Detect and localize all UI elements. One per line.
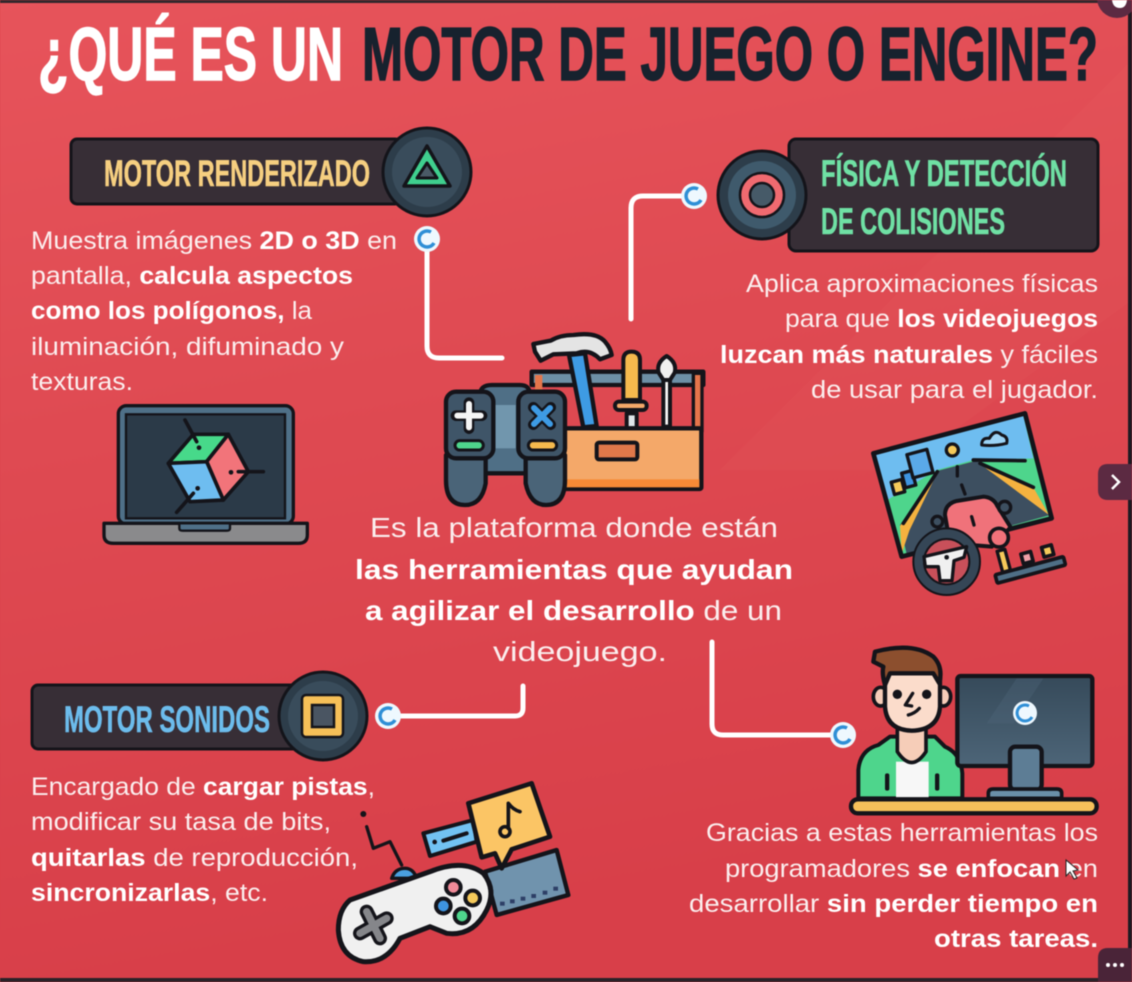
badge: motor renderizado: MOTOR RENDERIZADO [104, 153, 370, 194]
badge: física y detección [718, 139, 1098, 251]
text: motor renderizado: texturas. [31, 368, 133, 396]
text: motor renderizado [31, 227, 397, 396]
icon: controller with music [338, 783, 568, 962]
title [38, 12, 1098, 96]
icon: toolbox with gamepad [446, 334, 703, 505]
text: motor renderizado: como los polígonos, la [31, 297, 312, 325]
badge: motor renderizado [71, 128, 471, 216]
hammer [533, 334, 612, 427]
panel: motor sonidos [31, 672, 568, 962]
text: motor renderizado: iluminación, difuminado y [31, 333, 345, 361]
panel: motor renderizado [31, 128, 471, 543]
text: programmers: programadores se enfocan en [725, 855, 1098, 883]
text: central description: videojuego. [493, 636, 667, 667]
text: programmers: otras tareas. [934, 925, 1098, 953]
icon: driving simulator [873, 413, 1066, 590]
badge: física y detección: DE COLISIONES [821, 201, 1005, 242]
badge: motor sonidos [32, 672, 367, 760]
badge: motor sonidos: MOTOR SONIDOS [64, 699, 270, 740]
icon: laptop with cube [104, 406, 307, 543]
text: motor renderizado: pantalla, calcula aspectos [31, 262, 353, 290]
panel: programmers [689, 648, 1098, 953]
text: física: para que los videojuegos [785, 305, 1098, 333]
text: física [720, 270, 1098, 404]
text: física: luzcan más naturales y fáciles [720, 341, 1098, 369]
text: física: Aplica aproximaciones físicas [746, 270, 1098, 298]
text: motor sonidos: quitarlas de reproducción, [31, 844, 358, 872]
connector lines [388, 196, 843, 735]
text: motor renderizado: Muestra imágenes 2D o 3D en [31, 227, 397, 255]
screwdrivers [615, 352, 675, 428]
text: central description: Es la plataforma donde están [370, 512, 778, 543]
text: motor sonidos: Encargado de cargar pistas , [31, 773, 375, 801]
text: física: de usar para el jugador. [811, 376, 1098, 404]
text: motor sonidos [31, 773, 375, 907]
text: central description [355, 512, 793, 667]
panel: física y detección de colisiones [718, 139, 1098, 590]
viewer controls [1097, 0, 1132, 982]
connector nodes [375, 183, 1037, 748]
text: motor sonidos: sincronizarlas , etc. [31, 879, 268, 907]
text: programmers: desarrollar sin perder tiempo en [689, 890, 1098, 918]
title: ¿QUÉ ES UN [38, 12, 343, 96]
text: motor sonidos: modificar su tasa de bits, [31, 808, 331, 836]
icon: programmer at monitor [851, 648, 1097, 813]
text: programmers [689, 819, 1098, 953]
text: programmers: Gracias a estas herramientas los [706, 819, 1098, 847]
text: central description: las herramientas que ayudan [355, 554, 793, 585]
cursor [1066, 860, 1078, 879]
text: central description: a agilizar el desarrollo de un [365, 595, 782, 626]
